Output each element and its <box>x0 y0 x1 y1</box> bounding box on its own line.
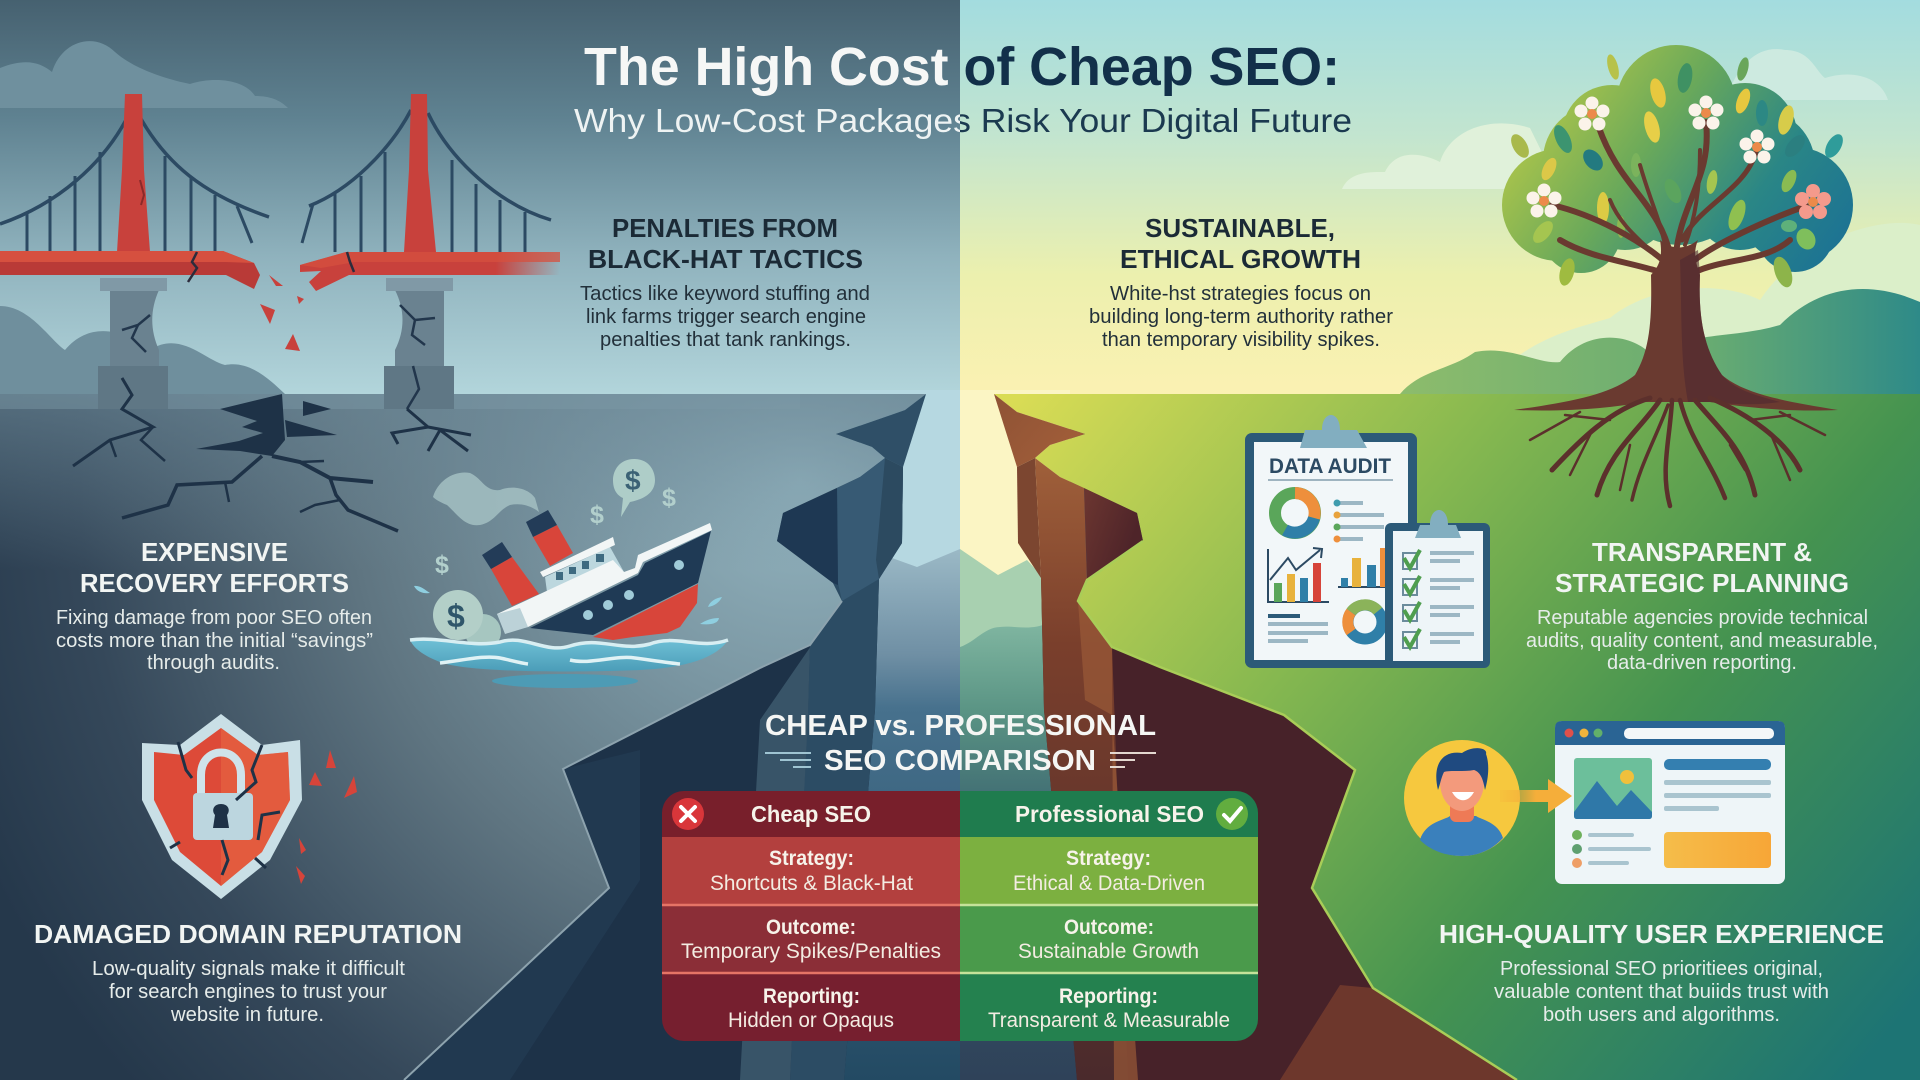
small donut <box>1348 605 1382 639</box>
bar charts <box>1268 548 1386 602</box>
body text: link farms trigger search engine <box>586 305 866 328</box>
checklist clipboard <box>1385 510 1490 668</box>
user avatar <box>1404 740 1520 856</box>
cheap column header <box>672 798 871 830</box>
clouds: right sky <box>1342 49 1920 394</box>
call to action button <box>1664 832 1771 868</box>
panel: damaged domain reputation <box>34 919 462 1026</box>
content lines <box>1572 759 1771 868</box>
cheap column rows: Outcome: <box>766 916 856 939</box>
heading: RECOVERY EFFORTS <box>80 568 349 598</box>
right pier <box>384 278 454 409</box>
floating dollar signs <box>435 484 676 579</box>
hills: left horizon <box>0 306 285 394</box>
heading: PENALTIES FROM <box>612 213 838 243</box>
heading: STRATEGIC PLANNING <box>1555 568 1849 598</box>
money bag: $ <box>447 598 465 634</box>
checklist rows <box>1403 550 1474 648</box>
body text: through audits. <box>147 651 280 674</box>
hills: right horizon <box>1400 289 1920 394</box>
money bubble <box>613 459 655 517</box>
professional column header <box>1015 798 1248 830</box>
cheap column rows: Hidden or Opaqus <box>728 1009 894 1032</box>
body text: Fixing damage from poor SEO often <box>56 606 372 629</box>
cheap column rows: Strategy: <box>769 847 854 870</box>
donut chart <box>1275 493 1315 533</box>
money bag <box>433 590 501 650</box>
arrow <box>1500 779 1572 813</box>
cheap column rows: Shortcuts & Black-Hat <box>710 872 913 895</box>
trunk and branches <box>1552 122 1806 272</box>
suspension cables <box>0 110 551 252</box>
icon: cracked shield with padlock <box>142 714 357 899</box>
heading: SUSTAINABLE, <box>1145 213 1335 243</box>
heading: HIGH-QUALITY USER EXPERIENCE <box>1439 919 1884 949</box>
body text: website in future. <box>170 1003 324 1026</box>
table backgrounds <box>662 791 1258 1041</box>
image placeholder <box>1574 758 1652 819</box>
heading: EXPENSIVE <box>141 537 288 567</box>
body text <box>92 957 405 1026</box>
body text <box>1526 606 1878 674</box>
money bubble: $ <box>625 465 641 496</box>
main clipboard <box>1245 415 1417 668</box>
body text: data-driven reporting. <box>1607 651 1797 674</box>
background: right clear sky <box>960 0 1920 400</box>
professional column rows: Ethical & Data-Driven <box>1013 872 1205 895</box>
body text: costs more than the initial “savings” <box>56 629 373 652</box>
left pier <box>98 278 168 409</box>
hull <box>497 523 712 640</box>
professional column rows: Reporting: <box>1059 985 1158 1008</box>
heading <box>1555 537 1849 598</box>
heading: BLACK-HAT TACTICS <box>588 244 863 274</box>
data audit label: DATA AUDIT <box>1269 455 1391 478</box>
heading <box>80 537 349 598</box>
funnels <box>482 510 573 606</box>
comparison heading <box>765 710 1156 777</box>
panel: transparent and strategic planning <box>1526 537 1878 674</box>
cabin <box>540 537 624 592</box>
browser window <box>1555 721 1785 884</box>
body text: Tactics like keyword stuffing and <box>580 282 870 305</box>
falling debris <box>260 275 304 351</box>
splash drops <box>414 586 722 624</box>
blossoms <box>1526 96 1831 219</box>
subtitle: Why Low-Cost Packages Risk Your Digital Future <box>574 102 1352 139</box>
cliff edge highlight <box>404 601 842 1080</box>
professional column rows: Transparent & Measurable <box>988 1009 1230 1032</box>
icon: data audit clipboards <box>1245 415 1490 668</box>
cheap column rows: Temporary Spikes/Penalties <box>681 940 941 963</box>
floating dollar signs: $ <box>662 484 676 512</box>
cliff: right brown rock <box>994 394 1517 1080</box>
comparison heading: CHEAP vs. PROFESSIONAL <box>765 710 1156 742</box>
body text: valuable content that buiids trust with <box>1494 980 1829 1003</box>
shield cracks <box>170 742 280 875</box>
icon: user and website <box>1404 721 1785 884</box>
cliff: left dark rock <box>404 394 926 1080</box>
broken deck right <box>300 252 560 291</box>
body text: for search engines to trust your <box>109 980 387 1003</box>
towers <box>117 94 150 252</box>
heading <box>1120 213 1361 274</box>
row dividers <box>662 905 1258 973</box>
heading <box>588 213 863 274</box>
comparison table <box>662 791 1258 1041</box>
icon: sinking ship <box>410 459 728 688</box>
legend rows <box>1334 500 1384 542</box>
ground cracks <box>73 378 471 531</box>
professional column rows: Strategy: <box>1066 847 1151 870</box>
body text: Low-quality signals make it difficult <box>92 957 405 980</box>
cheap column header: Cheap SEO <box>751 801 871 827</box>
canyon: distant valley <box>840 390 1085 1080</box>
panel: expensive recovery efforts <box>56 537 373 674</box>
leaves <box>1507 53 1847 290</box>
padlock <box>193 752 253 840</box>
cheap column rows: Reporting: <box>763 985 860 1008</box>
roots <box>1530 398 1825 506</box>
illustration: flowering tree <box>1502 45 1853 506</box>
canopy <box>1502 45 1853 273</box>
body text <box>56 606 373 674</box>
illustration: broken bridge <box>0 94 560 409</box>
broken deck left <box>0 180 260 289</box>
heading accent lines <box>765 753 1156 767</box>
heading: ETHICAL GROWTH <box>1120 244 1361 274</box>
background: left storm sky <box>0 0 960 400</box>
body text <box>1089 282 1393 351</box>
body text: than temporary visibility spikes. <box>1102 328 1380 351</box>
body text <box>580 282 870 351</box>
cheap column rows <box>681 847 941 1032</box>
professional column rows: Outcome: <box>1064 916 1154 939</box>
professional column header: Professional SEO <box>1015 801 1204 827</box>
heading: DAMAGED DOMAIN REPUTATION <box>34 919 462 949</box>
floating dollar signs: $ <box>590 501 604 529</box>
heading: TRANSPARENT & <box>1592 537 1812 567</box>
body text: Professional SEO prioritiees original, <box>1500 957 1823 980</box>
ground: right plain <box>994 394 1920 1080</box>
body text: penalties that tank rankings. <box>600 328 851 351</box>
body text: building long-term authority rather <box>1089 305 1393 328</box>
smoke <box>433 472 539 525</box>
panel: high-quality user experience <box>1439 919 1884 1026</box>
comparison heading: SEO COMPARISON <box>824 745 1096 777</box>
ground: left plain <box>0 394 926 1080</box>
body text: Reputable agencies provide technical <box>1537 606 1868 629</box>
professional column rows: Sustainable Growth <box>1018 940 1199 963</box>
panel: penalties from black-hat tactics <box>580 213 870 351</box>
professional column rows <box>988 847 1230 1032</box>
body text: both users and algorithms. <box>1543 1003 1780 1026</box>
body text <box>1494 957 1829 1026</box>
panel: sustainable, ethical growth <box>1089 213 1393 351</box>
body text: audits, quality content, and measurable, <box>1526 629 1878 652</box>
shield debris <box>296 750 357 884</box>
cloud: top left <box>0 41 288 108</box>
body text: White-hst strategies focus on <box>1110 282 1371 305</box>
title <box>574 37 1352 139</box>
title: The High Cost of Cheap SEO: <box>584 37 1340 97</box>
floating dollar signs: $ <box>435 551 449 579</box>
water <box>410 639 728 688</box>
